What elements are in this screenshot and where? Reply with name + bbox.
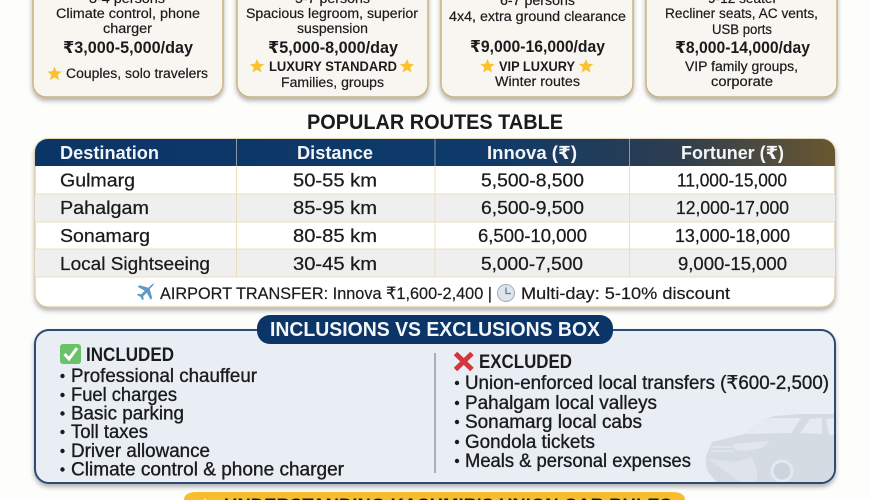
card: budget sedan: ₹3,000-5,000/day (63, 39, 194, 57)
table header row (60, 143, 784, 163)
card: Tempo Traveller: corporate (711, 74, 773, 89)
table footer note: AIRPORT TRANSFER: Innova ₹1,600-2,400 | (160, 284, 492, 303)
card: Fortuner (441, 0, 633, 97)
icon: star right (400, 59, 414, 73)
row: Pahalgam (60, 198, 789, 218)
row: Local Sightseeing: 5,000-7,500 (481, 254, 583, 274)
icon: star right (579, 59, 593, 73)
row: Local Sightseeing: Local Sightseeing (60, 254, 210, 274)
row: Sonamarg (60, 226, 790, 246)
list: included items: Toll taxes (71, 422, 148, 443)
list: excluded items: Gondola tickets (465, 432, 595, 453)
section: included (60, 344, 345, 480)
card: Tempo Traveller: ₹8,000-14,000/day (675, 39, 811, 57)
table footer note: Multi-day: 5-10% discount (521, 284, 730, 303)
row: Sonamarg: 80-85 km (293, 226, 377, 246)
list: included items (60, 366, 345, 480)
table header row: Fortuner (₹) (681, 143, 784, 163)
list: excluded items: Meals & personal expenses (465, 451, 691, 472)
row: Sonamarg: 6,500-10,000 (478, 226, 587, 246)
banner: understanding union car rules (184, 492, 685, 500)
icon: airplane (137, 283, 155, 300)
row: Gulmarg: 50-55 km (293, 170, 377, 190)
card: Fortuner: VIP LUXURY (499, 59, 575, 74)
table header row: Destination (60, 143, 159, 163)
table header row: Innova (₹) (487, 143, 577, 163)
watermark: car silhouette (706, 414, 834, 482)
row: Gulmarg: 5,500-8,500 (481, 170, 584, 190)
heading: popular routes table: POPULAR ROUTES TABLE (307, 110, 563, 134)
card: budget sedan: charger (103, 21, 153, 36)
row: Pahalgam: 12,000-17,000 (676, 198, 789, 218)
card: Tempo Traveller: USB ports (712, 22, 772, 37)
row: Gulmarg (60, 170, 787, 190)
card: Innova: LUXURY STANDARD (269, 59, 397, 74)
card: Tempo Traveller: Recliner seats, AC vents, (665, 6, 818, 21)
row: Pahalgam: 6,500-9,500 (481, 198, 584, 218)
card: budget sedan: Couples, solo travelers (66, 66, 208, 81)
icon: clock (498, 284, 514, 302)
list: excluded items (455, 373, 829, 472)
icon: warning triangle (204, 498, 206, 500)
card: Tempo Traveller (646, 0, 837, 97)
icon: star (47, 66, 62, 80)
card: budget sedan: Climate control, phone (56, 6, 200, 21)
list: excluded items: Pahalgam local valleys (465, 393, 657, 414)
heading pill: inclusions vs exclusions: INCLUSIONS VS EXCLUSIONS BOX (270, 319, 601, 341)
row: Local Sightseeing (60, 254, 787, 274)
card: Innova: Families, groups (281, 75, 384, 90)
row: Gulmarg: Gulmarg (60, 170, 135, 190)
card: budget sedan (33, 0, 223, 97)
card: Fortuner: ₹9,000-16,000/day (470, 38, 606, 56)
icon: green check (60, 344, 81, 364)
section: excluded (455, 352, 829, 472)
row: Sonamarg: Sonamarg (60, 226, 150, 246)
row: Gulmarg: 11,000-15,000 (677, 170, 787, 190)
panel: inclusions vs exclusions box (35, 330, 840, 490)
list: included items: Driver allowance (71, 441, 210, 462)
icon: red cross (456, 354, 472, 370)
row: Pahalgam: Pahalgam (60, 198, 149, 218)
list: included items: Climate control & phone charger (71, 460, 345, 480)
card: Innova: Spacious legroom, superior (246, 6, 419, 21)
table header row: Distance (297, 143, 373, 163)
card: Innova: suspension (297, 21, 368, 36)
row: Sonamarg: 13,000-18,000 (675, 226, 790, 246)
icon: star left (480, 59, 495, 73)
list: included items: Fuel charges (71, 385, 177, 406)
card: Innova: ₹5,000-8,000/day (268, 39, 399, 57)
panel: routes table (35, 139, 835, 307)
table footer note (137, 283, 730, 303)
card: Tempo Traveller: VIP family groups, (685, 59, 798, 74)
card: Fortuner: Winter routes (495, 74, 580, 89)
card: Innova (237, 0, 428, 97)
list: included items: Professional chauffeur (71, 366, 258, 387)
icon: star left (250, 59, 264, 73)
list: excluded items: Sonamarg local cabs (465, 412, 642, 433)
row: Pahalgam: 85-95 km (293, 198, 377, 218)
row: Local Sightseeing: 9,000-15,000 (678, 254, 787, 274)
section: excluded: EXCLUDED (479, 352, 572, 373)
section: included: INCLUDED (86, 345, 174, 366)
row: Local Sightseeing: 30-45 km (293, 254, 377, 274)
list: excluded items: Union-enforced local transfers (₹600-2,500) (465, 373, 829, 394)
list: included items: Basic parking (71, 404, 184, 424)
card: Fortuner: 4x4, extra ground clearance (449, 9, 626, 24)
